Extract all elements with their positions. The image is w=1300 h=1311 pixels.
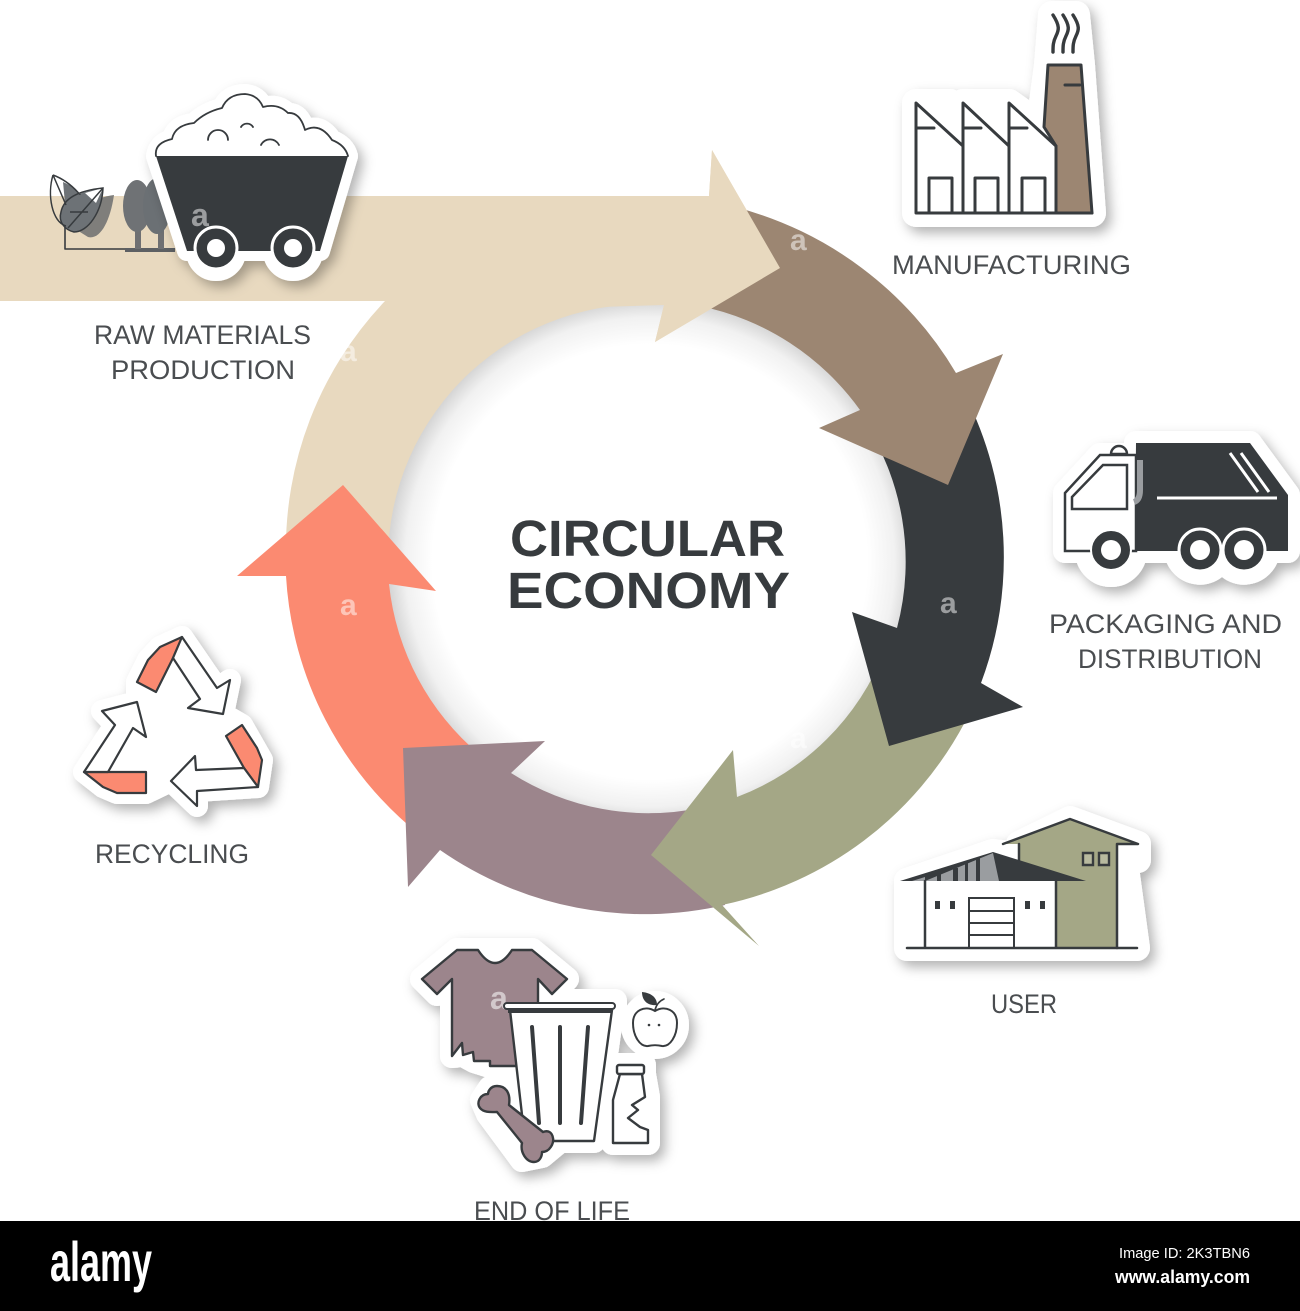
shirt: [422, 950, 567, 1066]
icon: house: [900, 819, 1138, 948]
windows: [1083, 853, 1109, 865]
window: [1072, 465, 1127, 509]
label: raw materials: [94, 320, 311, 385]
arrow: packaging (dark): [852, 395, 1023, 746]
cycle ring: [0, 150, 1023, 946]
icon: recycling: [84, 637, 262, 806]
garage roof: [900, 852, 1086, 881]
title: CIRCULAR: [510, 510, 785, 567]
title: ECONOMY: [507, 562, 790, 619]
factory outlines: [916, 85, 1092, 213]
sticker backing: [422, 950, 682, 1160]
center shadow disc: [373, 286, 917, 830]
watermark marks: [340, 224, 957, 755]
coral segments: [84, 637, 262, 793]
leaves: [51, 175, 114, 237]
watermark marks: a: [790, 224, 807, 257]
arrow: raw materials (beige): [0, 150, 780, 560]
icon: leaves and trees: [51, 175, 175, 252]
beacon: [1111, 446, 1127, 454]
bottle: [613, 1065, 648, 1143]
label: raw materials: RAW MATERIALS: [94, 320, 311, 350]
image id: Image ID: 2K3TBN6: [1119, 1245, 1250, 1262]
white stripes: [1157, 453, 1277, 498]
watermark marks: a: [340, 335, 357, 368]
watermark: [1134, 460, 1140, 502]
olive building: [1003, 819, 1138, 948]
watermark marks: a: [790, 722, 807, 755]
shirt: a: [490, 980, 508, 1016]
icon: trash: [422, 950, 682, 1162]
arrow: user (olive): [651, 650, 965, 946]
label: packaging and distribution: DISTRIBUTION: [1078, 644, 1262, 674]
icon: truck: [1065, 443, 1288, 575]
sticker backing: [84, 637, 262, 806]
label: manufacturing: MANUFACTURING: [892, 250, 1131, 280]
footer band: [0, 1221, 1300, 1311]
watermark marks: a: [940, 587, 957, 620]
sticker backing: [1065, 443, 1288, 575]
icon: factory: [916, 15, 1092, 213]
label: user: USER: [991, 989, 1057, 1019]
bone: [478, 1086, 553, 1162]
sticker backing: [907, 819, 1138, 948]
website: www.alamy.com: [1114, 1267, 1250, 1287]
label: recycling: RECYCLING: [95, 839, 249, 869]
icon: mine cart: [156, 94, 348, 271]
arrow: manufacturing (brown): [700, 207, 1003, 485]
white arrows: [84, 637, 258, 806]
garage walls: [925, 881, 1056, 948]
small windows: [935, 901, 1045, 909]
logo: alamy: [50, 1230, 152, 1293]
cart pile: [156, 94, 348, 156]
cart body: [156, 156, 348, 251]
door: [969, 898, 1014, 948]
arrow: recycling (coral): [237, 485, 480, 835]
sticker backing: [156, 94, 348, 271]
label: packaging and distribution: [1049, 609, 1282, 674]
ground lines: [65, 225, 130, 249]
trees: [123, 178, 175, 252]
label: raw materials: PRODUCTION: [111, 355, 295, 385]
chimney: [1044, 65, 1092, 213]
arrow head: raw materials overlap: [600, 150, 780, 342]
label: packaging and distribution: PACKAGING AND: [1049, 609, 1282, 639]
watermark marks: a: [340, 589, 357, 622]
label: end of life: END OF LIFE: [474, 1196, 630, 1226]
bin: [504, 1003, 615, 1141]
wheels: [195, 227, 314, 269]
truck body: [1135, 443, 1288, 551]
smoke: [1053, 15, 1078, 52]
apple: [633, 992, 677, 1046]
sticker backing: [916, 15, 1092, 213]
arrow: end of life (mauve): [403, 741, 725, 914]
icon: mine cart: a: [191, 197, 209, 233]
cab: [1065, 455, 1136, 551]
wheels: [1091, 529, 1265, 571]
title: [507, 510, 790, 619]
